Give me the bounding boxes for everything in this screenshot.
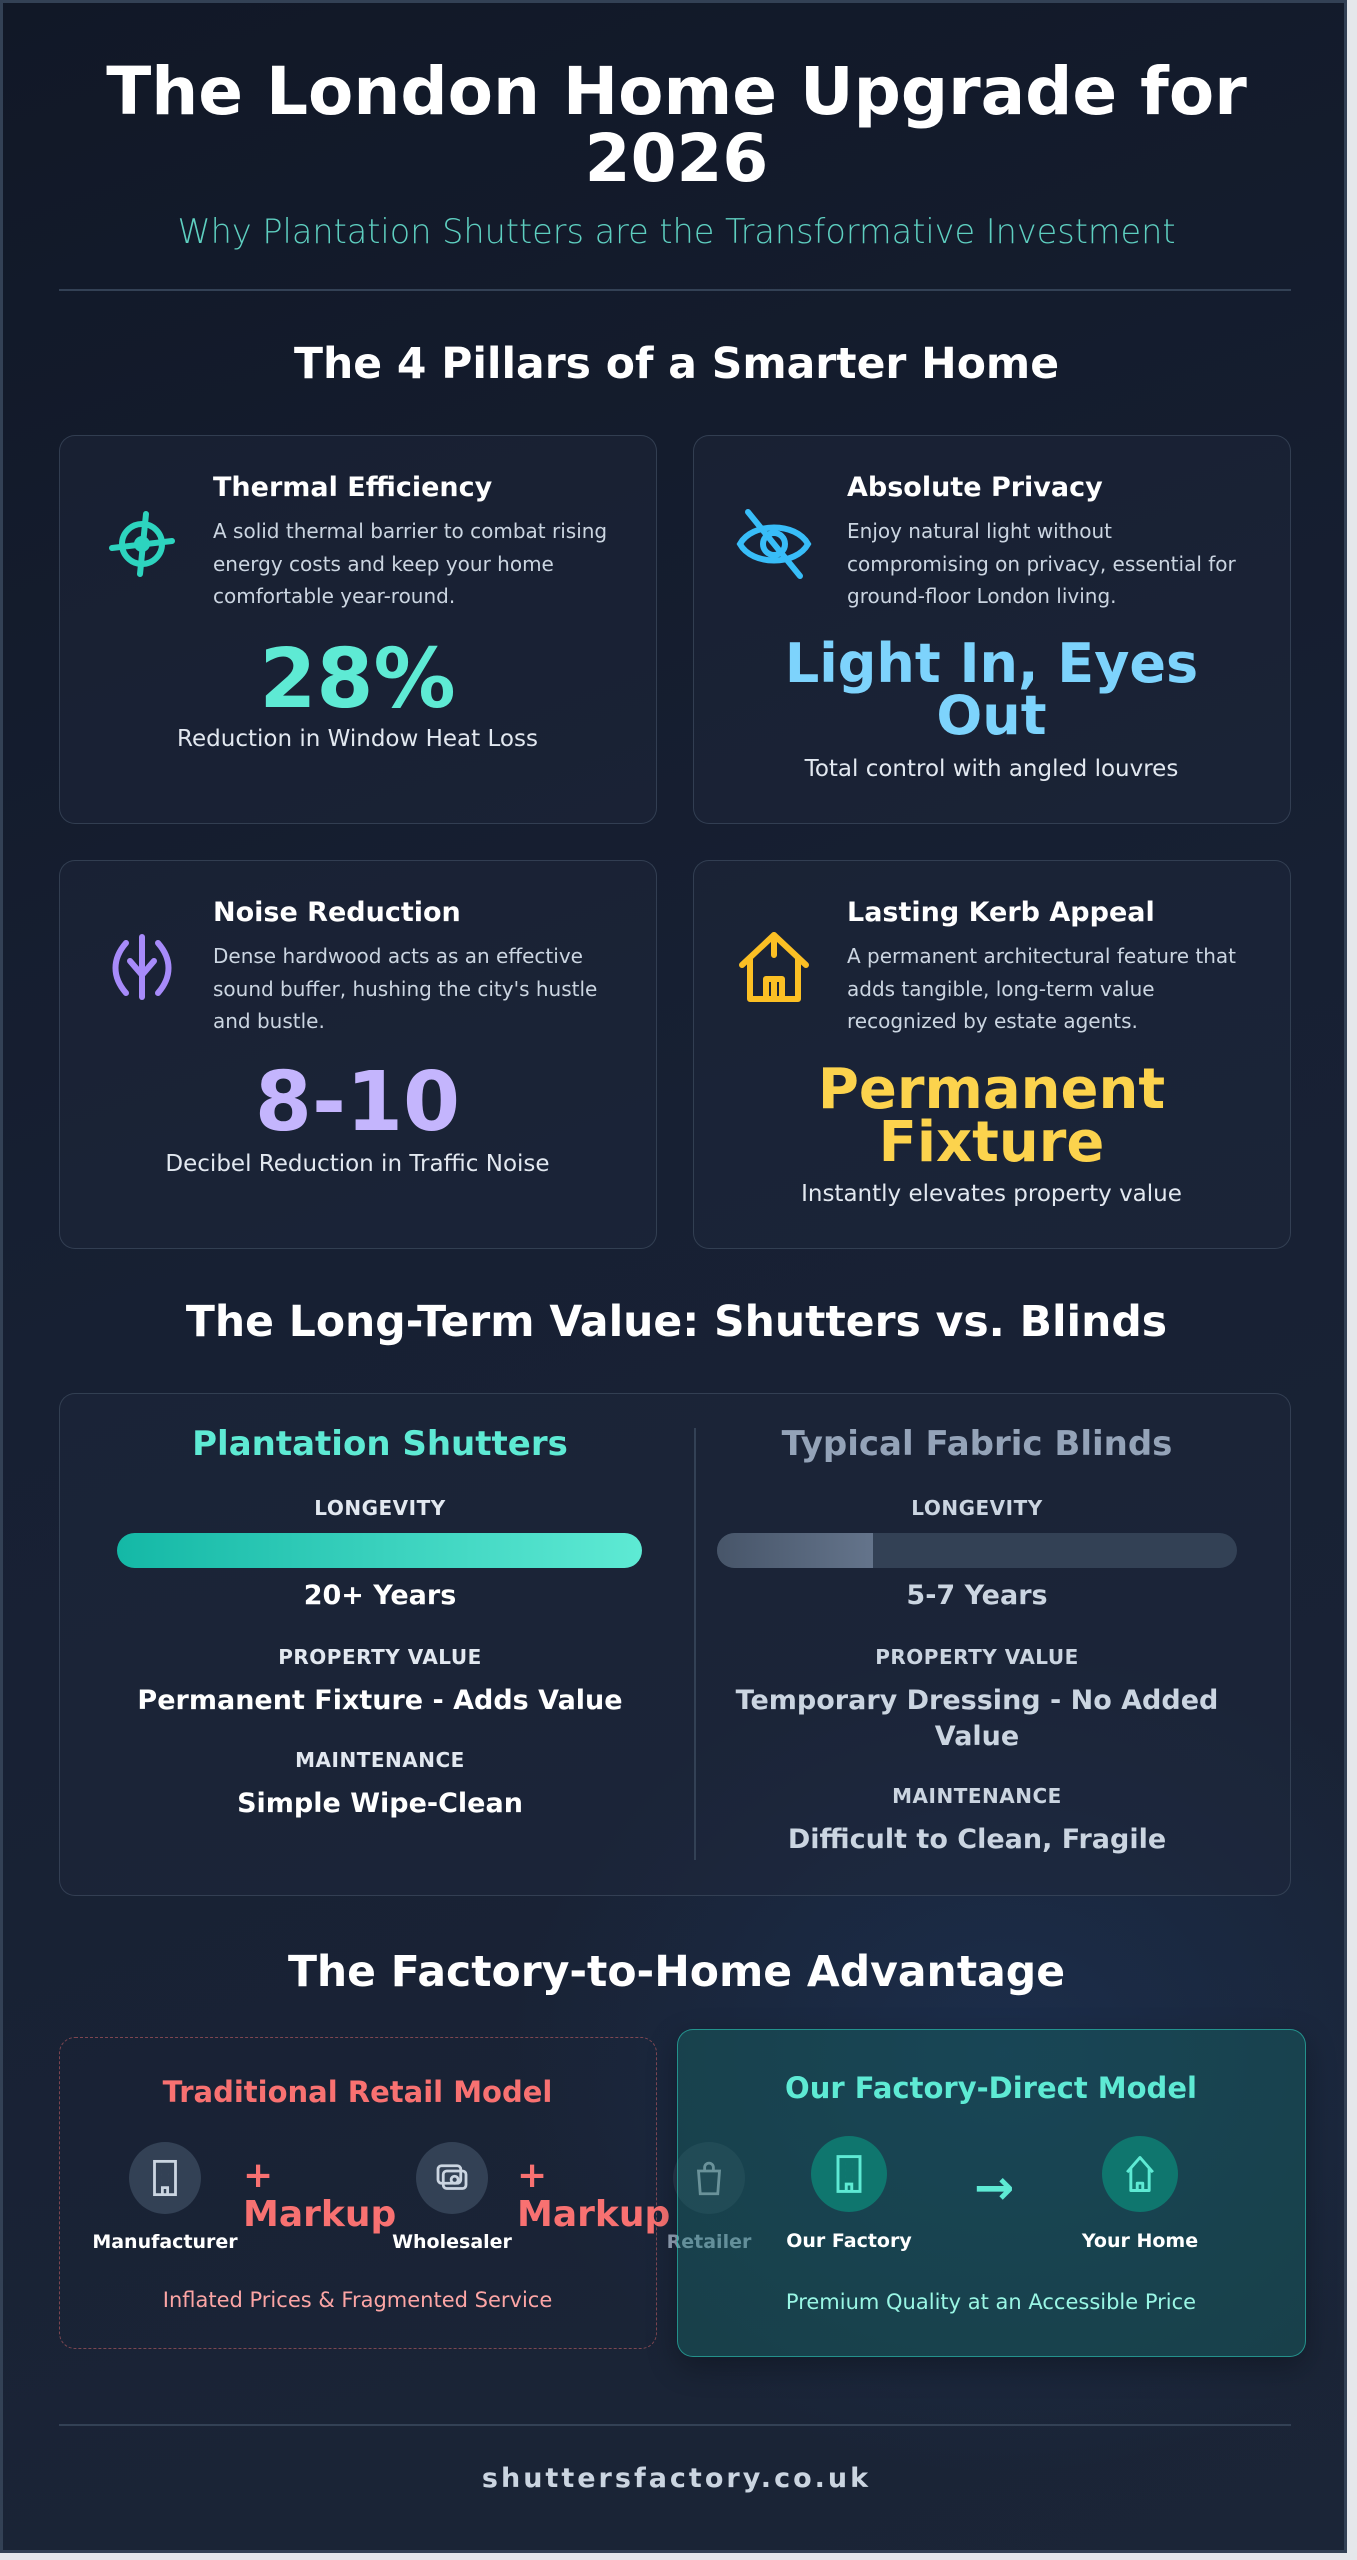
panel: traditional retail <box>59 2037 657 2349</box>
bar: longevity blinds <box>717 1533 1237 1568</box>
card title: Absolute Privacy <box>847 472 1103 503</box>
column: blinds: LONGEVITY <box>911 1496 1043 1520</box>
stat label: Reduction in Window Heat Loss <box>177 726 538 752</box>
heading: factory: The Factory-to-Home Advantage <box>288 1948 1065 1997</box>
column: blinds: Typical Fabric Blinds <box>782 1424 1172 1464</box>
column: blinds: 5-7 Years <box>906 1580 1048 1611</box>
panel: factory direct: Your Home <box>1082 2230 1198 2252</box>
panel: traditional retail: Traditional Retail Model <box>163 2075 552 2109</box>
title <box>106 53 1247 197</box>
panel: noise <box>59 860 657 1249</box>
stat: Fixture <box>879 1110 1104 1175</box>
card text: A permanent architectural feature that adds tangible, long-term value recognized by estate agents. <box>847 944 1236 1033</box>
markup 1 <box>243 2155 396 2235</box>
heading: pillars: The 4 Pillars of a Smarter Home <box>294 340 1059 389</box>
panel: kerb appeal <box>693 860 1291 1249</box>
title: 2026 <box>585 120 768 197</box>
markup 1: + <box>243 2155 273 2196</box>
panel: privacy <box>693 435 1291 824</box>
card text: A solid thermal barrier to combat rising energy costs and keep your home comfortable year-round. <box>213 519 607 608</box>
panel: factory direct: Premium Quality at an Accessible Price <box>786 2290 1196 2314</box>
heading: comparison: The Long-Term Value: Shutters vs. Blinds <box>186 1298 1167 1347</box>
markup 1: Markup <box>243 2194 396 2235</box>
panel: factory direct <box>677 2029 1306 2357</box>
panel: factory direct: Our Factory <box>786 2230 912 2252</box>
card title: Noise Reduction <box>213 897 461 928</box>
stat <box>818 1057 1165 1175</box>
markup 2 <box>517 2155 670 2235</box>
column: blinds: MAINTENANCE <box>892 1784 1062 1808</box>
column: blinds: Temporary Dressing - No Added <box>736 1685 1218 1716</box>
column: blinds: Value <box>935 1721 1019 1752</box>
stat <box>785 632 1198 747</box>
stat: Out <box>936 684 1047 747</box>
card text: Enjoy natural light without compromising on privacy, essential for ground-floor London living. <box>847 519 1236 608</box>
column: shutters: Simple Wipe-Clean <box>237 1788 523 1819</box>
panel: traditional retail: Wholesaler <box>392 2231 512 2253</box>
icon: eye off <box>736 509 812 579</box>
card title: Lasting Kerb Appeal <box>847 897 1155 928</box>
subtitle: Why Plantation Shutters are the Transformative Investment <box>178 212 1175 251</box>
icon: your home <box>1102 2136 1178 2212</box>
arrow: → <box>974 2160 1014 2216</box>
stat label: Instantly elevates property value <box>801 1181 1182 1207</box>
panel: traditional retail: Manufacturer <box>92 2231 238 2253</box>
icon: house <box>739 932 809 1002</box>
icon: sound <box>112 934 172 1000</box>
column: shutters: LONGEVITY <box>314 1496 446 1520</box>
card text: Dense hardwood acts as an effective sound buffer, hushing the city's hustle and bustle. <box>213 944 597 1033</box>
panel: comparison <box>59 1393 1291 1896</box>
column: blinds: Difficult to Clean, Fragile <box>788 1824 1166 1855</box>
panel: thermal efficiency <box>59 435 657 824</box>
column: shutters <box>117 1424 642 1819</box>
stat: 28% <box>259 632 456 727</box>
stat label: Total control with angled louvres <box>805 756 1178 782</box>
stat: Light In, Eyes <box>785 632 1198 695</box>
column: blinds: PROPERTY VALUE <box>875 1645 1079 1669</box>
stat label: Decibel Reduction in Traffic Noise <box>165 1151 550 1177</box>
markup 2: Markup <box>517 2194 670 2235</box>
column: shutters: MAINTENANCE <box>295 1748 465 1772</box>
stat: 8-10 <box>255 1055 460 1150</box>
icon: our factory <box>811 2136 887 2212</box>
markup 2: + <box>517 2155 547 2196</box>
column: shutters: Plantation Shutters <box>192 1424 568 1464</box>
panel: factory direct: Our Factory-Direct Model <box>785 2071 1197 2105</box>
column: shutters: PROPERTY VALUE <box>278 1645 482 1669</box>
panel: traditional retail: Inflated Prices & Fragmented Service <box>163 2288 552 2312</box>
card title: Thermal Efficiency <box>213 472 492 503</box>
title: The London Home Upgrade for <box>106 53 1247 130</box>
stat: Permanent <box>818 1057 1165 1122</box>
icon: manufacturer <box>129 2142 201 2214</box>
footer: shuttersfactory.co.uk <box>482 2463 871 2494</box>
icon: retailer <box>673 2142 745 2214</box>
icon: thermal <box>109 511 175 577</box>
column: blinds <box>717 1424 1237 1855</box>
column: shutters: 20+ Years <box>304 1580 456 1611</box>
bar: longevity shutters <box>117 1533 642 1568</box>
text: Retailer <box>667 2231 751 2253</box>
column: shutters: Permanent Fixture - Adds Value <box>137 1685 623 1716</box>
icon: wholesaler <box>416 2142 488 2214</box>
